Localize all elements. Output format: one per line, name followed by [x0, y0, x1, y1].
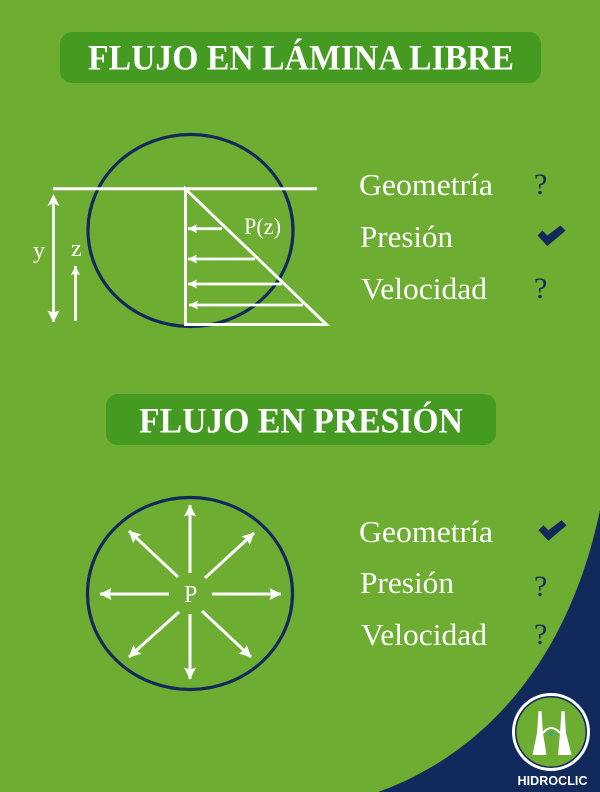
list: first section properties: [359, 167, 566, 306]
title: flujo en presión: FLUJO EN PRESIÓN: [139, 400, 463, 440]
label: P: P: [184, 582, 197, 608]
logo towers: [532, 711, 572, 755]
diagram: partially filled pipe: [33, 134, 326, 326]
label: y: y: [33, 238, 45, 264]
question mark: ?: [534, 618, 547, 651]
pressure arrows: [188, 229, 303, 305]
icon: check: [538, 520, 566, 541]
pipe circle: [88, 134, 293, 326]
Geometría: Geometría: [359, 514, 493, 549]
logo arch: [543, 728, 560, 733]
logo name: HIDROCLIC: [518, 774, 588, 788]
arrow: z height: [74, 266, 77, 321]
question mark: ?: [534, 168, 547, 201]
Presión: Presión: [360, 219, 454, 254]
logo: Hidroclic: [514, 694, 588, 788]
Geometría: Geometría: [359, 167, 493, 202]
arrow: y depth: [52, 204, 55, 322]
Velocidad: Velocidad: [361, 617, 487, 652]
pipe circle: [88, 498, 292, 690]
Presión: Presión: [360, 565, 455, 600]
logo ring: [514, 694, 588, 770]
logo disc: [516, 698, 586, 766]
navy corner shape: [378, 510, 600, 792]
question mark: ?: [534, 272, 547, 305]
diagram: full pipe: [88, 498, 292, 690]
icon: check: [538, 226, 566, 246]
Velocidad: Velocidad: [361, 271, 487, 306]
title: flujo en lámina libre: FLUJO EN LÁMINA LIBRE: [88, 38, 514, 78]
arrow head: y top: [48, 194, 60, 206]
logo water dot: [549, 732, 553, 736]
pressure triangle: [186, 189, 326, 324]
label: z: z: [71, 236, 82, 262]
water surface line: [53, 187, 317, 190]
radial arrows: [100, 505, 281, 679]
question mark: ?: [534, 570, 547, 603]
list: second section properties: [359, 514, 566, 652]
label: P(z): P(z): [244, 214, 281, 239]
title: flujo en presión: [106, 394, 496, 445]
